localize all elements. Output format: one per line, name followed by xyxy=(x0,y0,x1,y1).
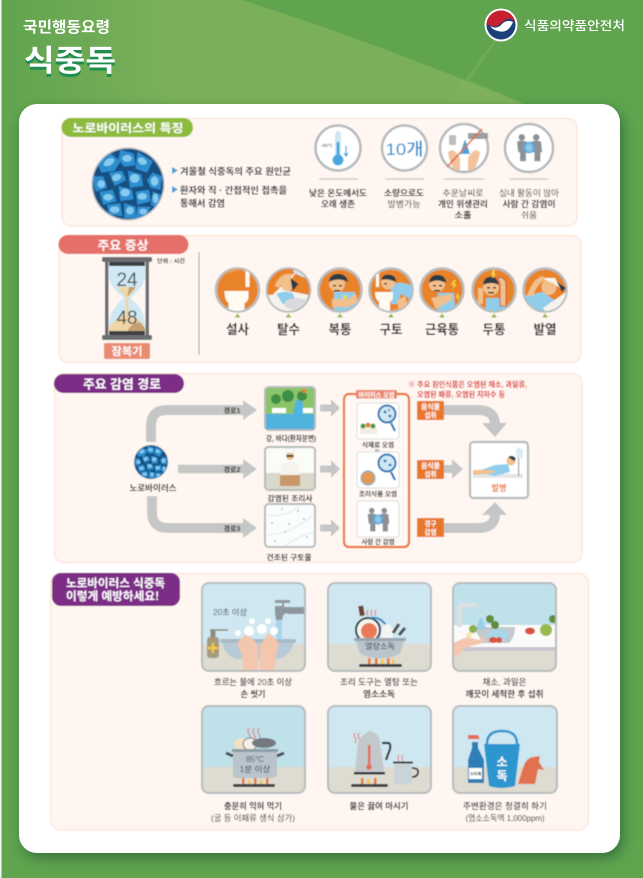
caption: low temperature xyxy=(309,188,367,209)
icon: two people xyxy=(505,124,553,172)
caption: indoor activity: 사람 간 감염이 xyxy=(502,199,556,209)
caption: small dose: 소량으로도 xyxy=(384,188,424,198)
note: main causative foods: 오염된 패류, 오염된 지하수 등 xyxy=(417,389,505,399)
panel: prevention xyxy=(50,573,588,830)
caption: small dose xyxy=(384,188,424,209)
icon: hourglass 24 to 48 hours xyxy=(102,257,152,340)
card label: dried vomit: 건조된 구토물 xyxy=(266,552,312,562)
card: boil utensils: 조리 도구는 열탕 또는 xyxy=(340,677,418,687)
heading: infection routes xyxy=(54,374,184,393)
card: boil utensils xyxy=(328,583,431,699)
panel: norovirus characteristics xyxy=(62,118,577,226)
icon: thermometer: -80°C xyxy=(321,143,334,148)
label: oral infection xyxy=(417,518,444,537)
main title shadow: 식중독 xyxy=(24,48,116,81)
white main panel xyxy=(19,104,620,853)
card: wash hands xyxy=(202,583,305,699)
heading: characteristics xyxy=(62,118,193,137)
card: wash vegetables: 채소, 과일은 xyxy=(482,677,527,687)
caption: cold weather hygiene: 개인 위생관리 xyxy=(438,199,488,209)
rules under icons xyxy=(319,178,548,180)
caption: cold weather hygiene: 소홀 xyxy=(454,210,472,220)
arrows: route 1, 2, 3: 경로2 xyxy=(224,465,241,474)
icon: norovirus particle xyxy=(90,146,166,222)
icon: taegeuk emblem xyxy=(484,8,518,42)
label: norovirus: 노로바이러스 xyxy=(130,483,177,493)
icon: norovirus xyxy=(133,444,169,480)
heading: main symptoms: 주요 증상 xyxy=(98,238,148,252)
card: boil utensils: 염소소독 xyxy=(363,689,395,699)
arrows: route 1, 2, 3: 경로3 xyxy=(224,524,241,533)
text block: bullets: 통해서 감염 xyxy=(180,198,225,208)
panel: main symptoms xyxy=(58,235,581,362)
text block: bullets: 겨울철 식중독의 주요 원인균 xyxy=(180,166,291,176)
card: boil water xyxy=(328,706,431,811)
label: food ingestion xyxy=(417,401,444,420)
card label: infected cook: 감염된 조리사 xyxy=(268,493,313,503)
arrows: route 1, 2, 3 xyxy=(151,400,257,538)
symptom: diarrhea xyxy=(216,268,259,337)
card: wash hands: 20초 이상 xyxy=(213,607,248,617)
box: onset of illness: 발병 xyxy=(492,483,506,493)
icon: handwashing crossed out xyxy=(440,124,488,172)
symptom: muscle pain: 근육통 xyxy=(425,322,459,337)
label: food ingestion 2: 섭취 xyxy=(424,470,436,478)
card: river and sea xyxy=(265,387,315,430)
main title: 식중독 xyxy=(24,45,116,78)
card: food ingredient contamination xyxy=(357,403,399,439)
text block: bullets xyxy=(172,166,291,208)
caption: cooked food contamination: 조리식품 오염 xyxy=(359,489,397,498)
caption: cold weather hygiene: 추운날씨로 xyxy=(442,188,484,198)
arrows to illness xyxy=(444,410,507,528)
symptom: dehydration: 탈수 xyxy=(277,322,300,337)
symptom: vomiting xyxy=(370,268,412,337)
card: wash vegetables xyxy=(453,583,557,699)
label: food ingestion: 섭취 xyxy=(424,410,436,420)
card: dried vomit xyxy=(265,504,315,547)
caption: food ingredient contamination: 식재료 오염 xyxy=(362,440,394,449)
symptom: diarrhea: 설사 xyxy=(226,322,249,337)
label: incubation period xyxy=(104,343,150,359)
label: food ingestion 2: 음식물 xyxy=(421,461,441,470)
label: food ingestion 2 xyxy=(417,460,444,479)
card: cook thoroughly: 85°C xyxy=(246,755,264,764)
card: disinfect surroundings: 소독제 xyxy=(470,771,481,776)
note: main causative foods xyxy=(408,379,527,399)
heading: main symptoms xyxy=(58,235,188,254)
box: virus contamination xyxy=(344,390,409,547)
card: boil water: 물은 끓여 마시기 xyxy=(350,801,408,811)
icon: thermometer xyxy=(316,126,360,170)
card label: river and sea: 강, 바다(환자분변) xyxy=(266,433,316,443)
panel: infection routes xyxy=(54,374,582,562)
card: person to person xyxy=(357,501,399,537)
agency name: 식품의약품안전처 xyxy=(524,19,625,33)
heading: characteristics: 노로바이러스의 특징 xyxy=(72,121,184,135)
card: disinfect surroundings: (염소소독액 1,000ppm) xyxy=(466,813,545,823)
card: cook thoroughly: 1분 이상 xyxy=(240,764,271,774)
card: disinfect surroundings xyxy=(453,706,557,823)
note: main causative foods: ※ 주요 원인식품은 오염된 채소, 과일류, xyxy=(408,379,527,389)
small arrows to contamination box xyxy=(320,399,340,537)
symptom: headache xyxy=(472,268,516,337)
logo: ministry emblem and name xyxy=(484,8,625,42)
caption: cold weather hygiene xyxy=(438,188,488,220)
symptom: dehydration xyxy=(267,268,310,337)
title xyxy=(23,19,116,81)
card: disinfect surroundings: 독 xyxy=(496,769,508,783)
symptom: abdominal pain xyxy=(318,268,362,337)
card: cook thoroughly: 충분히 익혀 먹기 xyxy=(224,801,282,811)
card: wash hands: 손 씻기 xyxy=(240,689,266,699)
card: wash vegetables: 깨끗이 세척한 후 섭취 xyxy=(466,689,544,699)
caption: indoor activity xyxy=(499,188,559,220)
symptom: vomiting: 구토 xyxy=(380,322,403,337)
caption: small dose: 발병가능 xyxy=(388,199,421,209)
unit note: 단위 : 시간 xyxy=(157,257,185,265)
card: boil utensils: 열탕소독 xyxy=(365,641,395,651)
box label: 바이러스 오염 xyxy=(358,390,395,399)
card: cook thoroughly: (굴 등 어패류 생식 삼가) xyxy=(211,813,295,823)
caption: person to person: 사람 간 감염 xyxy=(362,537,395,546)
heading: prevention: 노로바이러스 식중독 xyxy=(66,577,165,590)
card: disinfect surroundings: 소 xyxy=(496,755,508,769)
card: cooked food contamination xyxy=(357,452,399,488)
caption: indoor activity: 실내 활동이 많아 xyxy=(499,188,559,198)
label: food ingestion: 음식물 xyxy=(421,402,441,411)
arrows: route 1, 2, 3: 경로1 xyxy=(224,406,241,415)
label: oral infection: 경구 xyxy=(424,519,437,528)
heading: prevention: 이렇게 예방하세요! xyxy=(66,589,159,603)
card: cook thoroughly xyxy=(202,706,305,823)
heading: prevention xyxy=(52,573,180,606)
text block: bullets: 환자와 직 · 간접적인 접촉을 xyxy=(180,184,287,196)
small arrow down xyxy=(372,449,382,456)
icon: ten particles xyxy=(382,126,427,170)
symptom: headache: 두통 xyxy=(482,322,506,337)
box: onset of illness xyxy=(470,442,528,498)
icon: hourglass 24 to 48 hours: 48 xyxy=(116,308,138,329)
icon: hourglass 24 to 48 hours: 24 xyxy=(116,270,138,291)
caption: indoor activity: 쉬움 xyxy=(521,210,537,220)
card: infected cook xyxy=(265,447,315,490)
symptom: fever xyxy=(524,268,566,337)
card: wash hands: 흐르는 물에 20초 이상 xyxy=(214,677,292,687)
label: oral infection: 감염 xyxy=(424,528,436,536)
caption: low temperature: 낮은 온도에서도 xyxy=(309,188,367,198)
symptom: abdominal pain: 복통 xyxy=(328,322,352,337)
symptom: muscle pain xyxy=(420,268,464,337)
icon: ten particles: 10개 xyxy=(386,140,424,159)
symptom: fever: 발열 xyxy=(534,322,556,337)
caption: low temperature: 오래 생존 xyxy=(321,199,355,209)
heading: infection routes: 주요 감염 경로 xyxy=(83,378,161,392)
subtitle: 국민행동요령 xyxy=(23,19,110,36)
card: disinfect surroundings: 주변환경은 청결히 하기 xyxy=(463,801,547,811)
label: incubation period: 잠복기 xyxy=(112,344,142,358)
